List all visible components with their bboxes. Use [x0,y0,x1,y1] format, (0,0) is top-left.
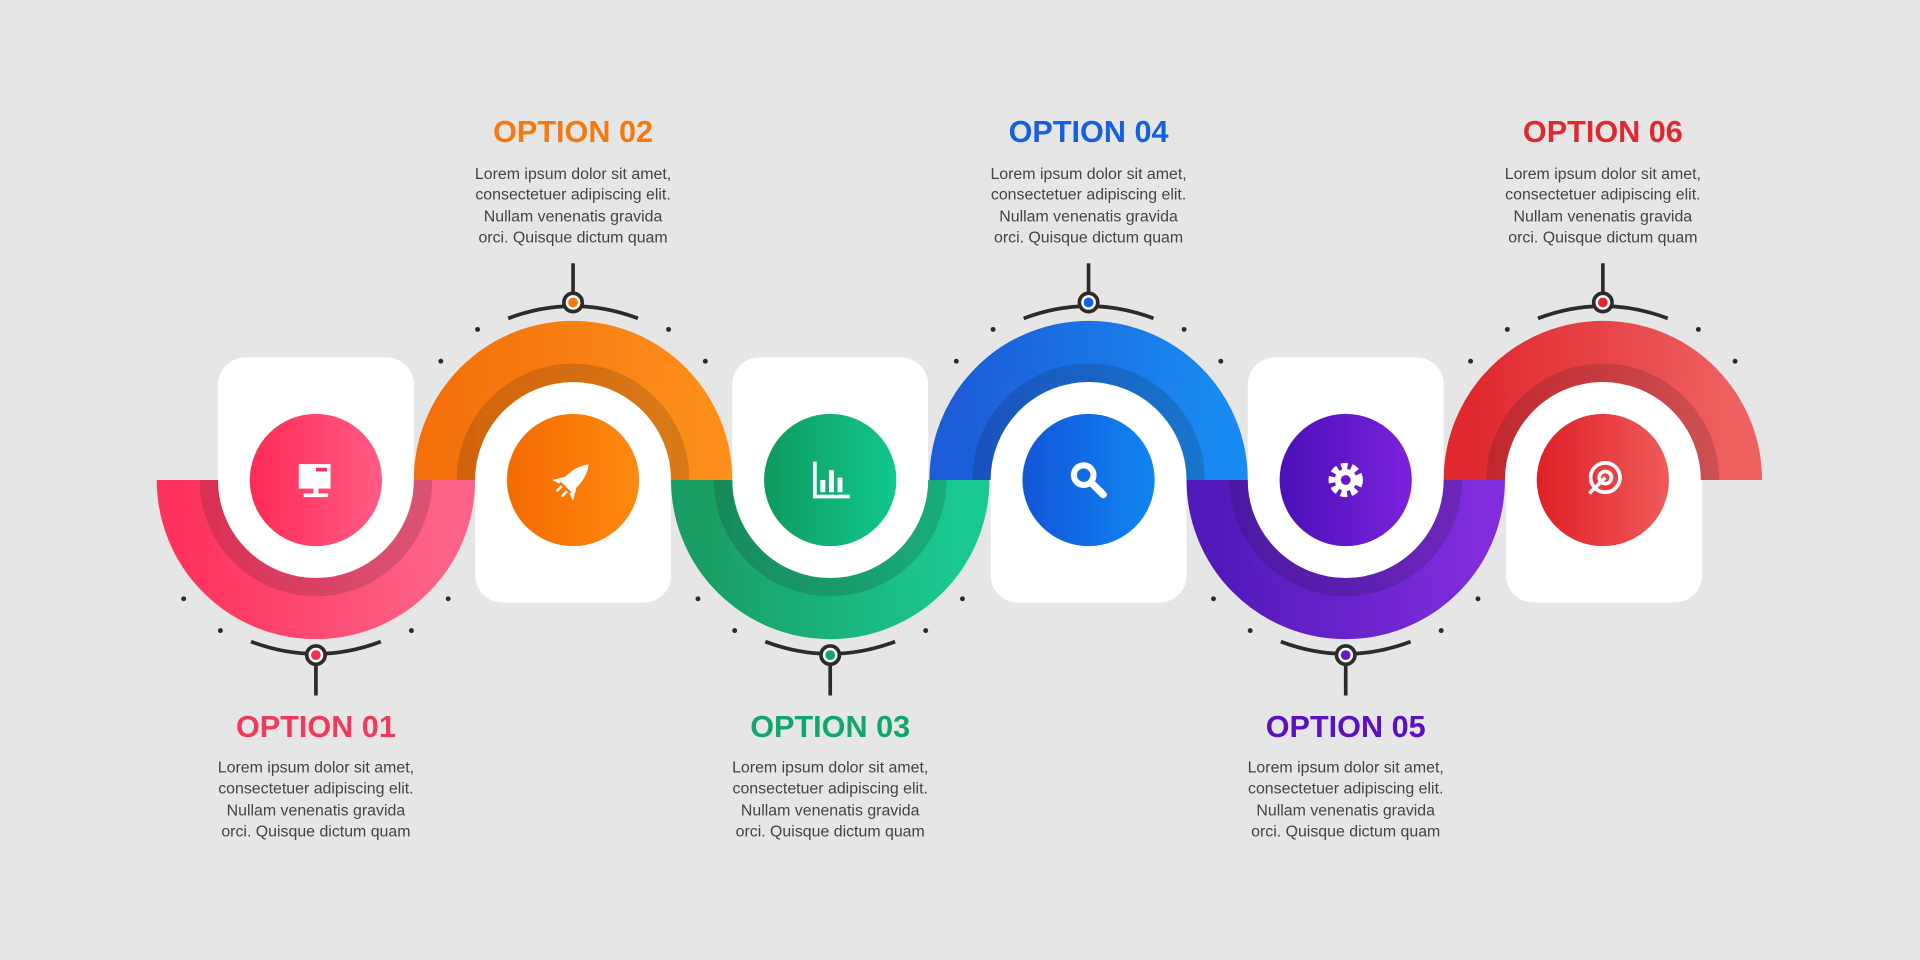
text: option 04: Lorem ipsum dolor sit amet, [990,166,1187,183]
text: option 02 [475,115,671,246]
text: option 05: orci. Quisque dictum quam [1251,823,1440,840]
icon: gear [1280,414,1412,546]
text: option 02: consectetuer adipiscing elit. [475,187,671,204]
connector: option 05 [1211,596,1480,696]
arc: option 05 [1217,480,1474,609]
text: option 02: Lorem ipsum dolor sit amet, [475,166,671,183]
icon: bar chart [764,414,896,546]
text: option 02: orci. Quisque dictum quam [478,229,668,246]
text: option 01: consectetuer adipiscing elit. [218,780,414,797]
card: option 02 [475,382,671,602]
text: option 03 [732,710,928,840]
connector: option 06 [1468,263,1738,364]
icon: search [1022,414,1155,546]
connector: option 02 [438,263,708,364]
text: option 06: consectetuer adipiscing elit. [1505,187,1701,204]
text: option 06: orci. Quisque dictum quam [1508,229,1697,246]
text: option 01: orci. Quisque dictum quam [221,823,411,840]
text: option 03: orci. Quisque dictum quam [736,823,925,840]
text: option 01: OPTION 01 [236,710,396,744]
text: option 04: Nullam venenatis gravida [999,209,1178,226]
text: option 06: Lorem ipsum dolor sit amet, [1505,166,1701,183]
arc: option 03 [702,480,959,609]
icon: monitor [250,414,382,546]
card: option 01 [218,358,414,578]
text: option 05: consectetuer adipiscing elit. [1248,780,1443,797]
card: option 06 [1506,382,1702,602]
connector: option 03 [696,596,965,696]
connector: option 01 [181,596,451,696]
text: option 04: orci. Quisque dictum quam [994,229,1183,246]
text: option 02: Nullam venenatis gravida [484,209,663,226]
icon: target [1537,414,1669,546]
text: option 03: Nullam venenatis gravida [741,803,920,820]
text: option 03: consectetuer adipiscing elit. [733,780,928,797]
text: option 05: Lorem ipsum dolor sit amet, [1248,760,1444,777]
text: option 02: OPTION 02 [493,115,653,149]
text: option 01 [218,710,414,840]
arc: option 01 [187,480,444,609]
arc: option 02 [444,351,702,480]
icon: rocket [507,414,639,546]
text: option 06 [1505,115,1701,246]
card: option 03 [732,358,928,578]
text: option 01: Nullam venenatis gravida [227,803,405,820]
arc: option 04 [960,351,1217,480]
text: option 04: OPTION 04 [1009,115,1169,149]
card: option 05 [1248,358,1444,578]
text: option 06: OPTION 06 [1523,115,1683,149]
card: option 04 [991,382,1187,602]
text: option 04: consectetuer adipiscing elit. [991,187,1186,204]
text: option 06: Nullam venenatis gravida [1514,209,1692,226]
connector: option 04 [954,263,1223,364]
text: option 05 [1248,710,1444,840]
text: option 01: Lorem ipsum dolor sit amet, [218,760,414,777]
text: option 04 [990,115,1187,246]
arc: option 06 [1474,351,1731,480]
text: option 03: Lorem ipsum dolor sit amet, [732,760,928,777]
text: option 05: OPTION 05 [1266,710,1426,744]
text: option 03: OPTION 03 [750,710,910,744]
text: option 05: Nullam venenatis gravida [1256,803,1435,820]
